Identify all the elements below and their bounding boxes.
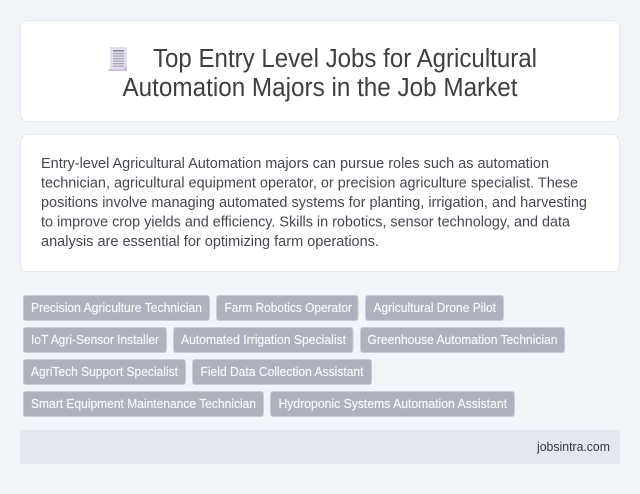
footer source text: jobsintra.com bbox=[536, 440, 610, 454]
tag: Hydroponic Systems Automation Assistant: Hydroponic Systems Automation Assistant bbox=[278, 397, 507, 411]
tag: Farm Robotics Operator: Farm Robotics Operator bbox=[224, 301, 352, 315]
title: Top Entry Level Jobs for Agricultural bbox=[153, 45, 537, 73]
tag: Automated Irrigation Specialist bbox=[174, 328, 353, 352]
tag: Smart Equipment Maintenance Technician bbox=[24, 392, 264, 416]
tag: Field Data Collection Assistant: Field Data Collection Assistant bbox=[200, 365, 364, 379]
tag: IoT Agri-Sensor Installer bbox=[24, 328, 166, 352]
tag: Smart Equipment Maintenance Technician: Smart Equipment Maintenance Technician bbox=[31, 397, 256, 411]
tag: Greenhouse Automation Technician: Greenhouse Automation Technician bbox=[368, 333, 558, 347]
tag: Hydroponic Systems Automation Assistant bbox=[270, 392, 514, 416]
tag: Precision Agriculture Technician: Precision Agriculture Technician bbox=[31, 301, 202, 315]
description text: Entry-level Agricultural Automation majors can pursue roles such as automation bbox=[41, 156, 549, 172]
description text: positions involve managing automated systems for planting, irrigation, and harvesting bbox=[41, 195, 587, 211]
icon: paper scroll bbox=[108, 48, 127, 71]
tag: Field Data Collection Assistant bbox=[192, 360, 372, 384]
tag: IoT Agri-Sensor Installer: IoT Agri-Sensor Installer bbox=[31, 333, 159, 347]
description text: to improve crop yields and efficiency. Skills in robotics, sensor technology, and data bbox=[41, 214, 571, 230]
panel: title card bbox=[20, 20, 620, 122]
title: Automation Majors in the Job Market bbox=[122, 74, 518, 102]
tag: AgriTech Support Specialist: AgriTech Support Specialist bbox=[31, 365, 178, 379]
tag: Agricultural Drone Pilot: Agricultural Drone Pilot bbox=[374, 301, 496, 315]
tag: Farm Robotics Operator bbox=[216, 296, 358, 320]
panel: description card bbox=[20, 134, 620, 272]
tag: Precision Agriculture Technician bbox=[24, 296, 210, 320]
tag: Agricultural Drone Pilot bbox=[366, 296, 504, 320]
description text: technician, agricultural equipment operator, or precision agriculture specialist. These bbox=[41, 176, 578, 192]
tag: Greenhouse Automation Technician bbox=[360, 328, 564, 352]
title bbox=[122, 45, 537, 102]
description text bbox=[41, 156, 587, 250]
tag: AgriTech Support Specialist bbox=[24, 360, 186, 384]
description text: analysis are essential for optimizing farm operations. bbox=[41, 234, 379, 250]
tag: Automated Irrigation Specialist: Automated Irrigation Specialist bbox=[181, 333, 346, 347]
job tags bbox=[24, 296, 564, 416]
footer bar bbox=[20, 430, 620, 464]
